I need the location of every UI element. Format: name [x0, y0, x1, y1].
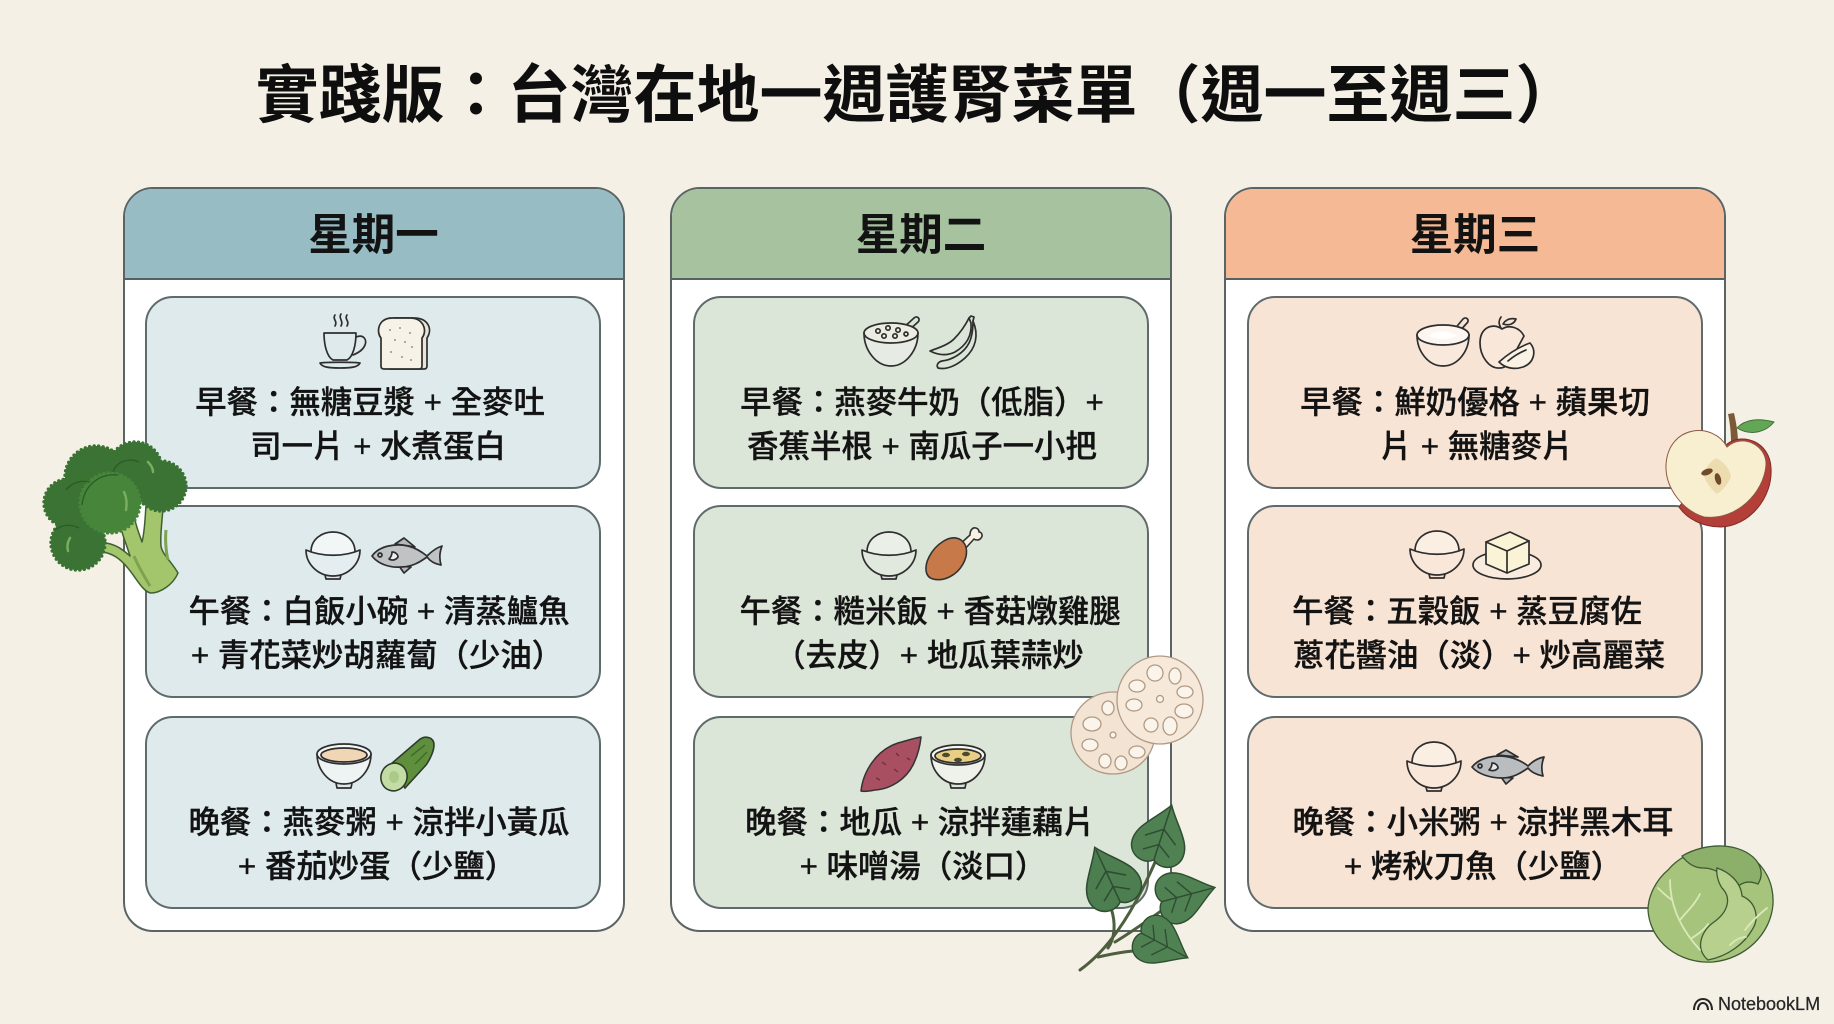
- text: Monday dinner menu: + 番茄炒蛋（少鹽）: [238, 849, 516, 884]
- heading: Monday: [124, 189, 622, 280]
- card: Tuesday dinner: [693, 716, 1149, 909]
- icon: miso soup bowl: [930, 744, 986, 789]
- icon: millet porridge bowl: [1406, 741, 1462, 792]
- card: Monday dinner: [145, 716, 601, 909]
- icon: NotebookLM mark: [1693, 998, 1713, 1010]
- icon: sweet potato: [860, 736, 922, 792]
- heading: Tuesday: 星期二: [856, 212, 986, 260]
- text: Tuesday dinner menu: 晚餐：地瓜 + 涼拌蓮藕片: [745, 805, 1095, 840]
- panel: Tuesday: [670, 187, 1172, 932]
- icon: banana: [929, 315, 977, 370]
- logo: NotebookLM: NotebookLM: [1718, 994, 1820, 1014]
- illustration: sweet potato leaves: [1078, 804, 1216, 972]
- illustration: broccoli: [42, 440, 188, 594]
- card: Wednesday dinner: [1247, 716, 1703, 909]
- text: Wednesday breakfast menu: 早餐：鮮奶優格 + 蘋果切: [1300, 385, 1650, 420]
- text: Monday lunch menu: 午餐：白飯小碗 + 清蒸鱸魚: [188, 594, 570, 629]
- text: Wednesday dinner menu: [1292, 805, 1674, 884]
- illustration: cabbage: [1647, 845, 1774, 963]
- icon: coffee cup: [319, 313, 366, 369]
- text: Wednesday lunch menu: 午餐：五穀飯 + 蒸豆腐佐: [1292, 594, 1642, 629]
- text: Monday lunch menu: + 青花菜炒胡蘿蔔（少油）: [191, 638, 563, 673]
- title: 實踐版：台灣在地一週護腎菜單（週一至週三）: [256, 61, 1578, 131]
- icon: tofu on plate: [1472, 531, 1542, 580]
- card: Monday breakfast: [145, 296, 601, 489]
- text: Wednesday breakfast menu: [1300, 385, 1650, 464]
- illustration: lotus root slices: [1070, 655, 1204, 775]
- card: Tuesday lunch: [693, 505, 1149, 698]
- text: Tuesday breakfast menu: 香蕉半根 + 南瓜子一小把: [747, 429, 1097, 464]
- icon: toast: [378, 317, 430, 370]
- illustration: halved apple: [1665, 413, 1775, 528]
- text: Tuesday lunch menu: （去皮）+ 地瓜葉蒜炒: [774, 638, 1084, 673]
- text: Wednesday lunch menu: [1292, 594, 1665, 673]
- icon: steamed sea bass: [371, 537, 443, 574]
- icon: multigrain rice bowl: [1409, 530, 1465, 579]
- text: Tuesday breakfast menu: [740, 385, 1104, 464]
- text: Monday breakfast menu: [195, 385, 545, 464]
- text: Wednesday lunch menu: 蔥花醬油（淡）+ 炒高麗菜: [1293, 638, 1665, 673]
- panel: Wednesday: [1224, 187, 1726, 932]
- icon: oat porridge bowl: [316, 743, 372, 789]
- text: Monday breakfast menu: 司一片 + 水煮蛋白: [250, 429, 506, 464]
- text: Wednesday breakfast menu: 片 + 無糖麥片: [1381, 429, 1573, 464]
- card: Wednesday breakfast: [1247, 296, 1703, 489]
- heading: Monday: 星期一: [308, 212, 439, 260]
- card: Monday lunch: [145, 505, 601, 698]
- icon: rice bowl: [305, 531, 361, 580]
- icon: apple and slice: [1479, 316, 1535, 370]
- text: Monday dinner menu: [188, 805, 570, 884]
- card: Tuesday breakfast: [693, 296, 1149, 489]
- text: Monday dinner menu: 晚餐：燕麥粥 + 涼拌小黃瓜: [188, 805, 570, 840]
- text: Wednesday dinner menu: 晚餐：小米粥 + 涼拌黑木耳: [1292, 805, 1674, 840]
- icon: oatmeal bowl with spoon: [863, 316, 920, 367]
- icon: yogurt bowl with spoon: [1416, 317, 1470, 367]
- panel: Monday: [122, 187, 624, 932]
- text: Wednesday dinner menu: + 烤秋刀魚（少鹽）: [1344, 849, 1622, 884]
- card: Wednesday lunch: [1247, 505, 1703, 698]
- text: Tuesday lunch menu: 午餐：糙米飯 + 香菇燉雞腿: [739, 594, 1121, 629]
- text: Monday breakfast menu: 早餐：無糖豆漿 + 全麥吐: [195, 385, 545, 420]
- icon: brown rice bowl: [861, 531, 917, 580]
- text: Monday lunch menu: [188, 594, 570, 673]
- text: Tuesday dinner menu: + 味噌湯（淡口）: [800, 849, 1046, 884]
- heading: Wednesday: [1226, 189, 1724, 280]
- text: Tuesday lunch menu: [739, 594, 1121, 673]
- icon: grilled saury: [1471, 749, 1545, 785]
- text: Tuesday breakfast menu: 早餐：燕麥牛奶（低脂）+: [740, 385, 1104, 420]
- text: Tuesday dinner menu: [745, 805, 1095, 884]
- heading: Tuesday: [672, 189, 1170, 280]
- heading: Wednesday: 星期三: [1410, 212, 1540, 260]
- icon: cucumber: [380, 736, 435, 792]
- icon: chicken drumstick: [925, 527, 983, 580]
